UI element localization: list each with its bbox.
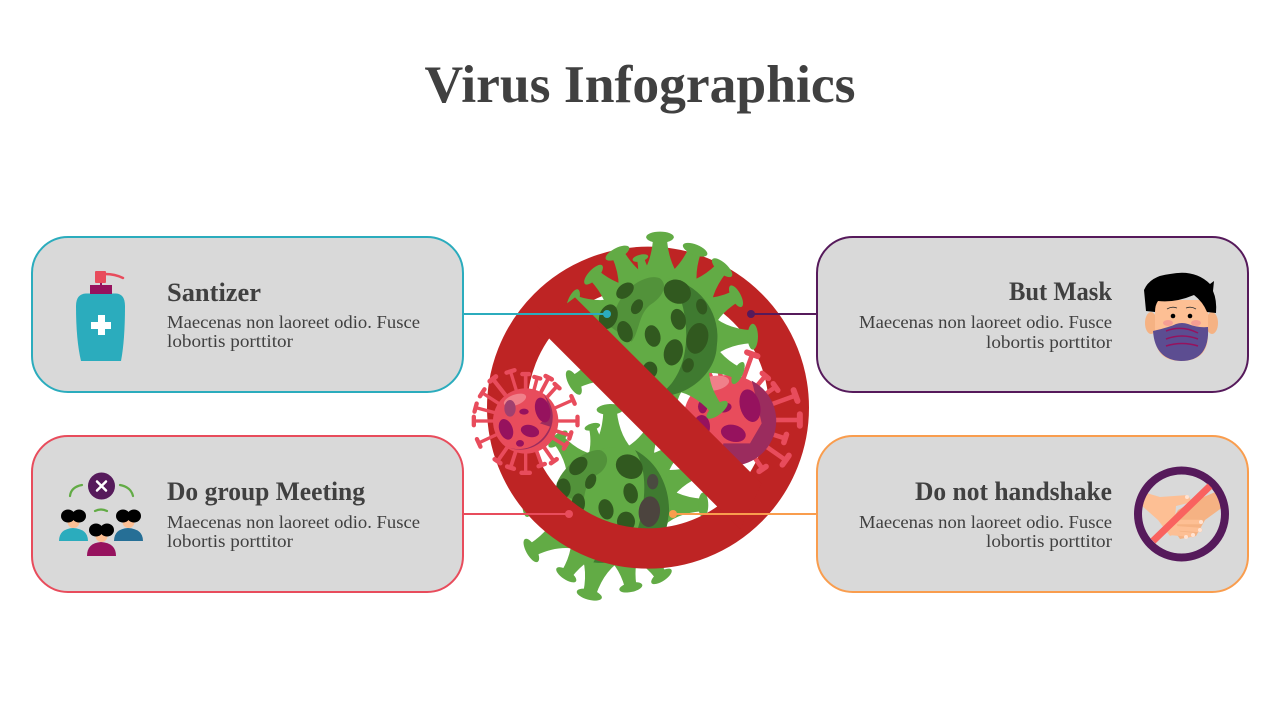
- icon: group meeting: [59, 472, 143, 556]
- virus: right red: [680, 349, 803, 475]
- virus: lower green: [514, 403, 711, 606]
- text: Do group Meeting body: [167, 512, 420, 551]
- icon: face with mask: [1144, 273, 1218, 361]
- panel: Do not handshake: [817, 436, 1248, 592]
- connector: Do not handshake: [669, 510, 817, 518]
- text: But Mask body: Maecenas non laoreet odio. Fusce: [859, 312, 1112, 332]
- panel: Santizer: [32, 237, 463, 392]
- panel: Do group Meeting: [32, 436, 463, 592]
- connector: But Mask: [747, 310, 817, 318]
- central illustration: prohibited virus: [472, 232, 803, 606]
- text: Do not handshake body: [859, 512, 1112, 551]
- text: Do not handshake body: Maecenas non laoreet odio. Fusce: [859, 512, 1112, 532]
- heading: But Mask: But Mask: [1009, 277, 1113, 306]
- text: Santizer body: [167, 312, 420, 351]
- connector: Santizer: [463, 310, 611, 318]
- virus: left red: [472, 368, 580, 475]
- icon: sanitizer bottle: [76, 271, 125, 361]
- text: Do not handshake body: lobortis porttitor: [986, 531, 1112, 551]
- text: But Mask body: [859, 312, 1112, 352]
- no-entry ring: [507, 267, 789, 548]
- no-entry bar: [537, 297, 762, 529]
- virus: upper green: [557, 232, 758, 434]
- text: Do group Meeting body: Maecenas non laoreet odio. Fusce: [167, 512, 420, 532]
- text: Santizer body: Maecenas non laoreet odio. Fusce: [167, 312, 420, 332]
- connector: Do group Meeting: [463, 510, 573, 518]
- heading: Santizer: Santizer: [167, 278, 261, 307]
- icon: no handshake: [1138, 470, 1225, 558]
- heading: Do not handshake: Do not handshake: [915, 477, 1112, 506]
- text: But Mask body: lobortis porttitor: [986, 332, 1112, 352]
- heading: Do group Meeting: Do group Meeting: [167, 477, 365, 506]
- title: Virus Infographics: [424, 56, 856, 114]
- text: Do group Meeting body: lobortis porttitor: [167, 531, 293, 551]
- panel: But Mask: [817, 237, 1248, 392]
- text: Santizer body: lobortis porttitor: [167, 331, 293, 351]
